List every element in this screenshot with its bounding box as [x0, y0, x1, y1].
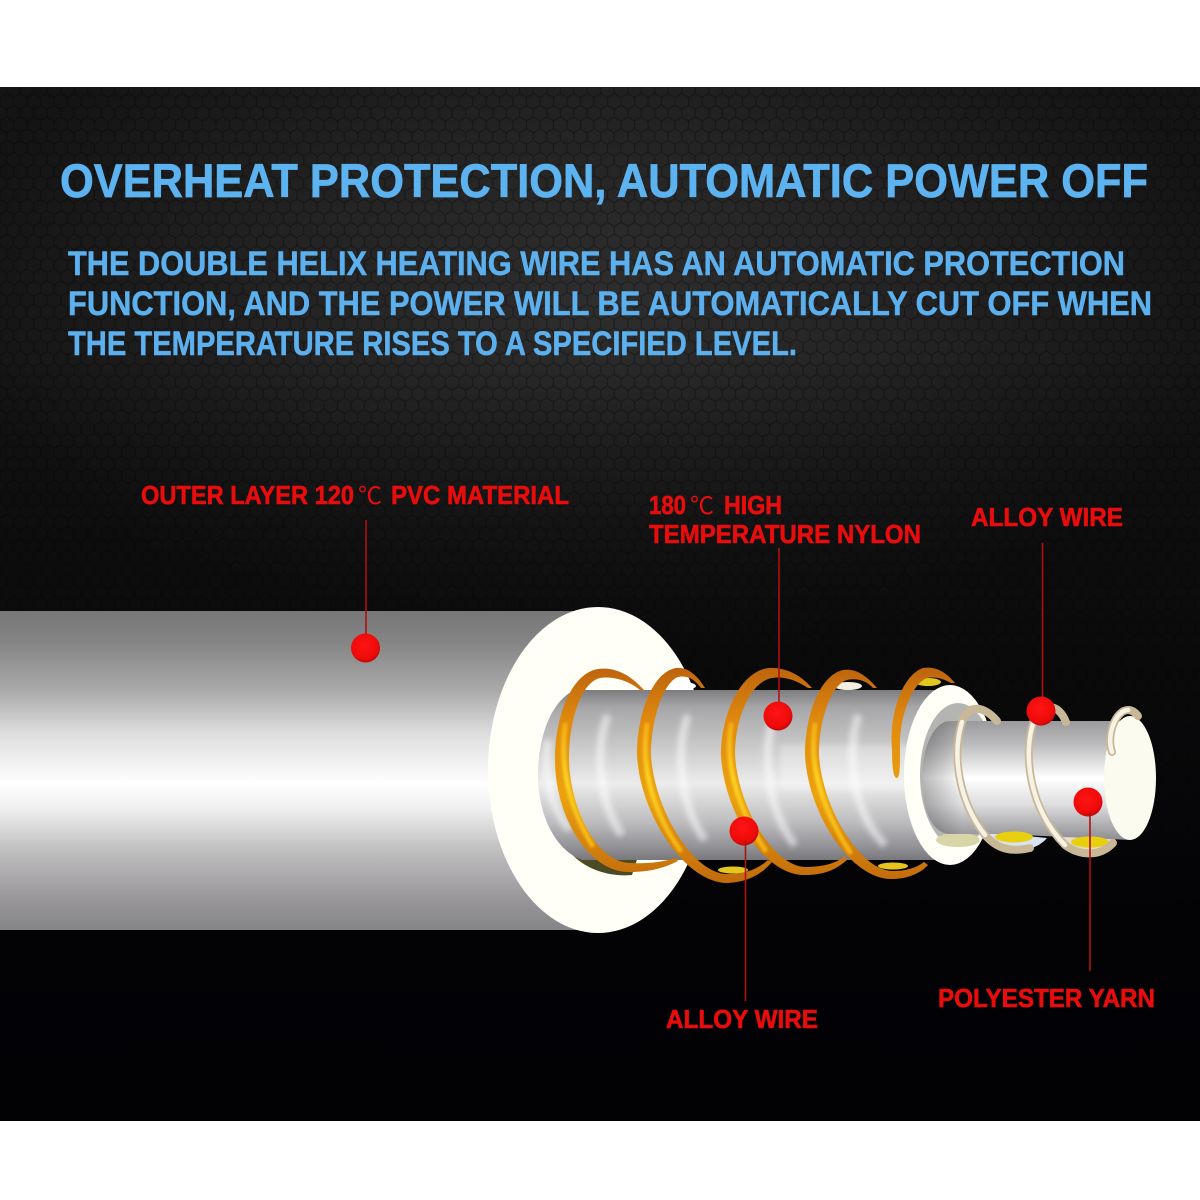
polyester leader line — [1089, 812, 1091, 971]
glints inside top of coils — [668, 678, 941, 690]
label: polyester yarn: POLYESTER YARN — [938, 983, 1155, 1013]
yellow glints below core — [995, 832, 1109, 848]
washer inner hole glint — [936, 833, 980, 847]
label: outer layer: PVC MATERIAL — [391, 480, 569, 510]
label: alloy wire bottom: ALLOY WIRE — [666, 1004, 818, 1034]
label: alloy wire top — [971, 502, 1123, 726]
blue crescent under first yarn ring — [985, 832, 1047, 850]
dark crescent at bottom of hole — [570, 850, 640, 875]
bottom alloy wire leader line — [744, 840, 746, 1001]
end cap — [1104, 716, 1156, 840]
label: high temperature nylon — [649, 490, 921, 730]
gold alloy wire coils — [555, 668, 955, 883]
thin conductor core — [922, 721, 1130, 840]
nylon end washer — [904, 685, 996, 865]
top alloy wire marker — [1026, 696, 1056, 726]
gold coil highlights — [564, 725, 850, 852]
nylon core — [538, 690, 945, 860]
label: high temperature nylon: ℃ — [690, 493, 714, 520]
cable illustration — [0, 607, 1156, 933]
nylon marker — [764, 702, 792, 730]
nylon leader line — [778, 548, 780, 710]
label: high temperature nylon: 180 — [649, 490, 686, 520]
core bright band right side — [780, 745, 935, 790]
thin core left shading — [922, 721, 962, 834]
yellow wire underside glints — [718, 862, 908, 874]
label: outer layer: OUTER LAYER 120 — [141, 480, 354, 510]
label: outer layer — [141, 480, 569, 662]
label: high temperature nylon: HIGH — [724, 490, 782, 520]
description text — [68, 245, 1152, 363]
translucent polyester yarn rings — [957, 707, 1138, 853]
label: polyester yarn — [938, 788, 1155, 1013]
outer PVC tube — [0, 611, 600, 930]
outer layer cut face — [488, 607, 708, 933]
label: outer layer: ℃ — [358, 483, 382, 510]
label: high temperature nylon: TEMPERATURE NYLON — [649, 519, 921, 549]
polyester marker — [1074, 788, 1102, 816]
description text: THE TEMPERATURE RISES TO A SPECIFIED LEVEL. — [68, 325, 797, 363]
top alloy wire leader line — [1042, 543, 1044, 704]
outer layer marker — [351, 634, 380, 662]
label: alloy wire top: ALLOY WIRE — [971, 502, 1123, 532]
beige crescent under second yarn ring — [1060, 835, 1116, 853]
core grooves — [547, 715, 885, 845]
label: alloy wire bottom — [666, 816, 818, 1034]
washer inner hole — [920, 703, 996, 847]
bottom alloy wire marker — [730, 816, 758, 846]
outer layer leader line — [365, 520, 367, 640]
